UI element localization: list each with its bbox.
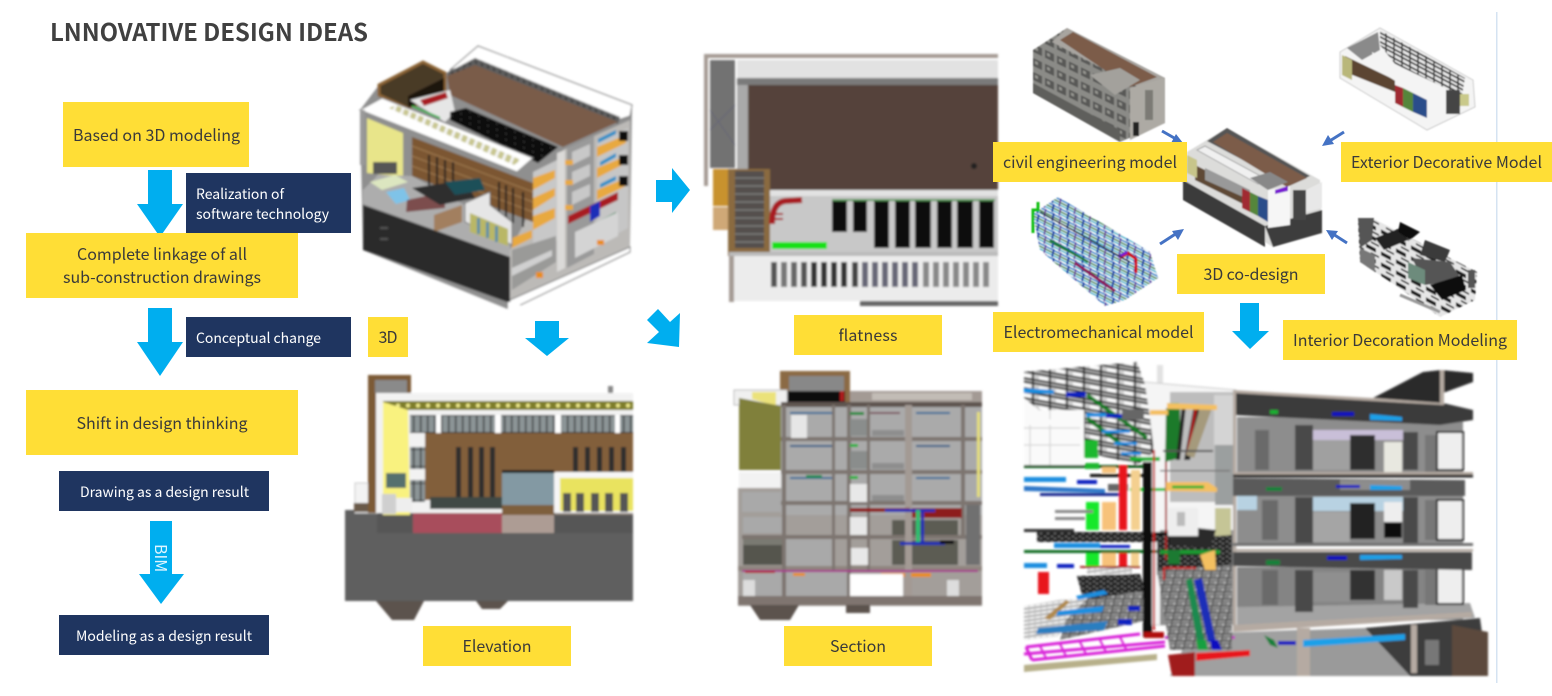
label: interior decoration modeling: Interior Decoration Modeling — [1293, 327, 1507, 351]
box: realization of software technology: software technology — [196, 204, 330, 224]
label: exterior decorative model: Exterior Decorative Model — [1351, 149, 1542, 173]
illustration: combined co-design model — [1183, 128, 1322, 247]
box: based on 3D modeling: Based on 3D modeling — [73, 122, 240, 146]
label: electromechanical model — [993, 312, 1204, 352]
box: complete linkage: sub-construction drawings — [63, 264, 261, 288]
box: drawing as a design result — [59, 471, 269, 511]
label: civil engineering model — [993, 142, 1187, 182]
label: flatness: flatness — [838, 322, 898, 346]
box: shift in design thinking: Shift in design thinking — [76, 410, 248, 434]
box: complete linkage: Complete linkage of all — [77, 241, 247, 265]
arrow: flow down 1 — [137, 170, 183, 237]
arrow: civil to co-design — [1162, 131, 1183, 143]
box: modeling as a design result: Modeling as a design result — [76, 626, 253, 646]
label: section — [784, 626, 932, 666]
label: elevation — [423, 626, 571, 666]
box: modeling as a design result — [59, 615, 269, 655]
label: section: Section — [830, 633, 886, 657]
panel: 3D co-design — [993, 28, 1552, 360]
illustration: 3D cutaway building — [360, 46, 632, 320]
arrow: interior to co-design — [1326, 230, 1347, 243]
box: conceptual change: Conceptual change — [196, 328, 321, 348]
box: conceptual change — [186, 317, 351, 357]
illustration: floor plan — [704, 54, 998, 306]
illustration: integrated BIM perspective model — [1024, 362, 1488, 676]
arrow: co-design to integrated model — [1232, 303, 1269, 349]
illustration: elevation — [345, 375, 633, 620]
box: realization of software technology — [186, 173, 351, 233]
title: LNNOVATIVE DESIGN IDEAS — [50, 13, 368, 48]
arrow: 3D to elevation — [525, 321, 569, 356]
box: complete linkage — [26, 233, 298, 298]
box: based on 3D modeling — [63, 102, 249, 167]
arrow: 3D to section — [647, 309, 680, 347]
illustration: electromechanical model — [1033, 197, 1158, 306]
arrow: BIM — [139, 521, 184, 604]
label: interior decoration modeling — [1283, 320, 1517, 360]
box: shift in design thinking — [26, 390, 298, 455]
label: flatness — [794, 315, 942, 355]
panel: design thinking flow — [26, 102, 351, 655]
illustration: section — [734, 371, 982, 620]
arrow: flow down 2 — [137, 308, 183, 376]
box: drawing as a design result: Drawing as a design result — [80, 482, 250, 502]
label: 3D — [368, 317, 408, 357]
illustration: interior decoration model — [1358, 218, 1477, 317]
illustration: civil engineering model — [1033, 28, 1165, 142]
label: exterior decorative model — [1341, 142, 1552, 182]
illustration: exterior decorative model — [1340, 28, 1475, 130]
label: 3D: 3D — [378, 324, 398, 348]
arrow: BIM: BIM — [150, 544, 174, 572]
arrow: exterior to co-design — [1322, 132, 1344, 146]
arrow: electromechanical to co-design — [1160, 229, 1184, 244]
box: realization of software technology: Realization of — [196, 184, 284, 204]
label: civil engineering model: civil engineering model — [1003, 149, 1177, 173]
label: 3D co-design — [1177, 254, 1325, 294]
arrow: 3D to plan — [656, 168, 690, 213]
label: electromechanical model: Electromechanical model — [1004, 319, 1194, 343]
label: 3D co-design: 3D co-design — [1204, 261, 1298, 285]
label: elevation: Elevation — [462, 633, 532, 657]
